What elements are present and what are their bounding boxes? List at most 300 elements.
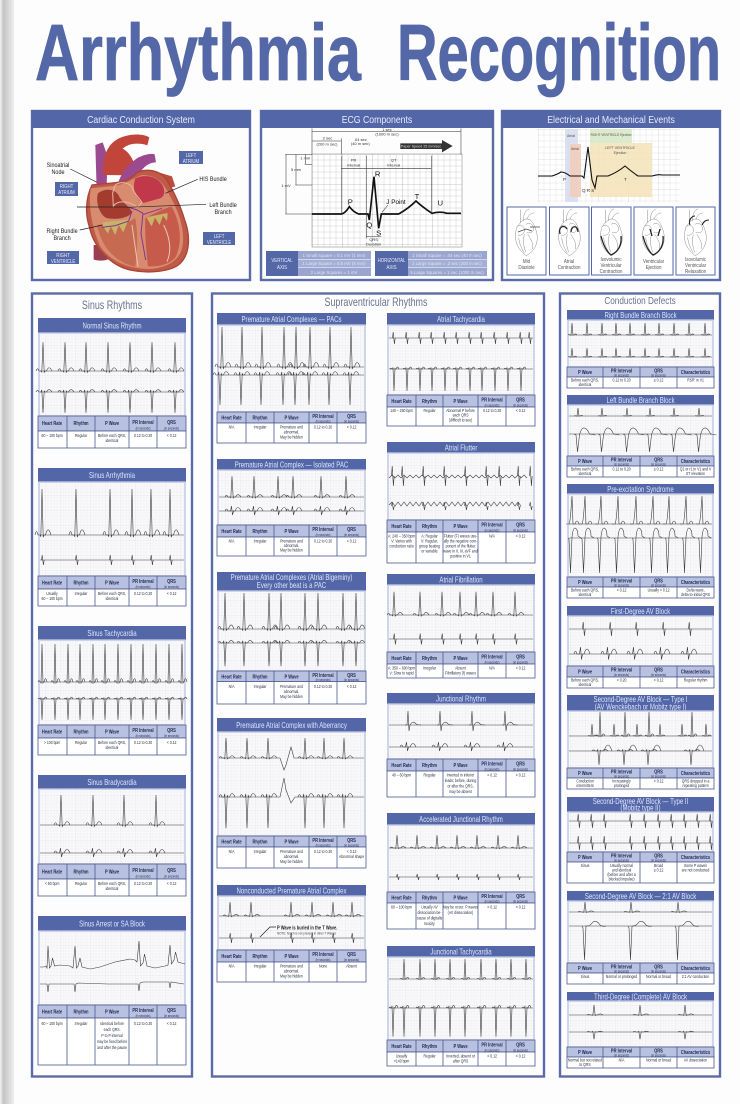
- diagram: Ventricular Ejection: Ventricular: [643, 259, 664, 265]
- data table: < 0.12: [516, 772, 526, 778]
- data table: (in seconds): [316, 533, 330, 537]
- data table: P Wave: [578, 370, 592, 375]
- data table: N/A: [229, 684, 235, 689]
- card: Sinus Arrest or SA Block: Sinus Arrest or SA Block: [79, 920, 145, 929]
- panel: Cardiac Conduction System: [32, 110, 250, 280]
- data table: [217, 836, 366, 868]
- data table: P Wave: [453, 656, 468, 661]
- data table: identical: [579, 382, 591, 387]
- card: Nonconducted Premature Atrial Complex: [217, 885, 366, 982]
- card: Premature Atrial Complex with Aberrancy: Premature Atrial Complex with Aberrancy: [236, 721, 347, 730]
- data table: < 0.12: [617, 587, 627, 593]
- data table: P Wave: [578, 966, 592, 971]
- diagram: Ventricular Ejection: [634, 207, 673, 275]
- data table: May be hidden: [280, 694, 303, 699]
- data table: Irregular: [75, 591, 88, 596]
- data table: Heart Rate: [221, 839, 242, 845]
- ECG timing chart: LEFT VENTRICLE: [605, 146, 636, 150]
- data table: 0.12 to 0.20: [612, 377, 631, 383]
- data table: A: 350 – 600 bpm: [388, 665, 415, 671]
- data table: < 0.12: [167, 1021, 177, 1026]
- label box: right ventricle: RIGHT: [56, 253, 70, 259]
- card: Pre-excitation Syndrome: [566, 484, 714, 598]
- data table: [567, 852, 714, 883]
- data table: < 0.12: [347, 849, 356, 854]
- data table: Normal but not related: [568, 1057, 602, 1063]
- data table: 0.12 to 0.20: [134, 1021, 153, 1026]
- ECG diagram: waveform and dimensions: R: [375, 170, 381, 179]
- diagram: Ventricular Ejection: Ejection: [646, 265, 662, 271]
- data table: (in seconds): [164, 734, 179, 738]
- data table: leads; before, during: [445, 778, 476, 783]
- diagram: Isovolumic Ventricular Contraction: Ventricular: [600, 263, 622, 269]
- label: HIS Bundle: HIS Bundle: [199, 175, 227, 183]
- data table: 0.12 to 0.20: [134, 591, 153, 596]
- data table: (in seconds): [651, 1053, 666, 1058]
- data table: abnormal.: [284, 543, 299, 548]
- data table: < 0.12: [516, 1053, 526, 1059]
- data table: (in seconds): [164, 874, 179, 879]
- data table: (in seconds): [651, 373, 666, 378]
- data table: 0.12 to 0.20: [314, 849, 333, 854]
- label box: right ventricle: VENTRICLE: [51, 259, 76, 265]
- data table: < 60 bpm: [45, 881, 60, 886]
- card: Premature Atrial Complexes (Atrial Bigeminy): [217, 572, 366, 704]
- data table: PR Interval: [611, 769, 632, 775]
- label: Right Bundle Branch: Right Bundle: [47, 227, 78, 235]
- data table: Rhythm: [73, 421, 89, 426]
- data table: (in seconds): [513, 403, 528, 408]
- data table: Heart Rate: [42, 580, 63, 586]
- data table: (in seconds): [614, 1053, 629, 1058]
- data table: are not conducted: [682, 867, 709, 873]
- data table: (AV dissociation): [448, 910, 474, 915]
- card: Right Bundle Branch Block: Right Bundle Branch Block: [604, 311, 677, 320]
- data table: Abnormal shape: [339, 854, 365, 859]
- data table: Regular: [424, 408, 436, 413]
- data table: Regular rhythm: [684, 677, 708, 683]
- ECG diagram: waveform and dimensions: T: [415, 192, 420, 201]
- data table: [38, 864, 186, 896]
- diagram: Atrial Contraction: [550, 207, 589, 275]
- ECG trace: [389, 711, 533, 751]
- data table: Inverted, absent or: [446, 1053, 475, 1059]
- data table: (in seconds): [651, 969, 666, 974]
- data table: may be absent: [449, 789, 473, 794]
- diagram: Isovolumic Ventricular Contraction: Isovolumic: [600, 257, 622, 263]
- data table: N/A: [229, 849, 235, 854]
- ECG trace: [218, 593, 365, 666]
- ECG trace: [40, 795, 184, 857]
- data table: < 0.12: [487, 772, 498, 778]
- data table: Sinus: [581, 863, 589, 868]
- ECG timing chart: P: [563, 177, 566, 182]
- data table: and identical: [612, 867, 631, 873]
- data table: (in seconds): [614, 774, 629, 779]
- data table: (in seconds): [513, 660, 528, 665]
- data table: P Wave: [578, 669, 592, 675]
- data table: (in seconds): [614, 373, 629, 378]
- card: Junctional Rhythm: Junctional Rhythm: [436, 695, 486, 704]
- data table: Irregular: [254, 684, 267, 689]
- ECG trace: [35, 489, 184, 565]
- data table: PR Interval: [481, 761, 503, 767]
- data table: Irregular: [254, 849, 267, 854]
- ECG diagram: waveform and dimensions: (1000 m sec): [375, 132, 399, 137]
- data table: QRS: [347, 838, 356, 843]
- data table: identical: [106, 745, 118, 750]
- data table: PR Interval: [132, 1008, 154, 1013]
- panel: ECG Components: [261, 110, 493, 280]
- data table: P Wave: [453, 524, 468, 529]
- data table: P Wave: [578, 855, 592, 860]
- data table: Before each QRS,: [98, 740, 126, 745]
- data table: Before each QRS,: [98, 591, 126, 596]
- data table: PR Interval: [312, 673, 334, 678]
- data table: QRS: [516, 894, 525, 899]
- ECG trace: [387, 592, 533, 644]
- data table: PR Interval: [611, 368, 632, 374]
- data table: (in seconds): [485, 528, 499, 533]
- data table: PR Interval: [611, 853, 632, 859]
- label box: left atrium: ATRIUM: [183, 159, 199, 165]
- panel heading: ECG Components: [342, 114, 412, 126]
- data table: N/A: [619, 1057, 625, 1063]
- data table: Rhythm: [252, 529, 268, 534]
- data table: PR Interval: [481, 894, 503, 899]
- data table: Characteristics: [681, 669, 711, 675]
- data table: Q1 or r1 in V1 and V: [680, 466, 711, 472]
- card: Second-Degree AV Block - Type II: Second-Degree AV Block — Type II: [593, 797, 688, 806]
- ECG trace: [569, 814, 712, 850]
- data table: Regular: [75, 881, 88, 886]
- card: Second-Degree AV Block - Type I: Second-Degree AV Block — Type I: [594, 695, 687, 704]
- data table: (difficult to see): [449, 417, 473, 423]
- data table: Before each QRS,: [571, 677, 599, 683]
- card: Second-Degree AV Block - Type I: (AV Wenckebach or Mobitz type I): [595, 703, 686, 712]
- data table: (in seconds): [485, 403, 499, 408]
- data table: Before each QRS,: [571, 466, 599, 472]
- data table: QRS: [347, 673, 356, 678]
- ECG diagram: waveform and dimensions: .2 sec: [322, 135, 332, 140]
- label: Sinoatrial Node: Node: [52, 168, 65, 176]
- data table: Heart Rate: [42, 1009, 63, 1015]
- table: vertical axis: [266, 251, 371, 276]
- data table: P Wave: [284, 415, 299, 421]
- card: Sinus Arrhythmia: Sinus Arrhythmia: [89, 471, 135, 480]
- data table: Normal or broad: [646, 974, 671, 979]
- data table: Flutter (F) waves usu-: [444, 533, 477, 539]
- data table: (in seconds): [316, 678, 330, 682]
- ECG diagram: waveform and dimensions: 1 mm: [300, 155, 311, 160]
- ECG trace: [36, 342, 184, 413]
- data table: intermittent: [577, 783, 594, 788]
- data table: Rhythm: [73, 580, 89, 586]
- data table: or variable: [421, 548, 438, 554]
- data table: Rhythm: [73, 1009, 89, 1015]
- data table: 0.12 to 0.20: [134, 881, 153, 886]
- data table: (in seconds): [614, 583, 629, 588]
- data table: QRS: [654, 667, 663, 673]
- table: horizontal axis: 5 Large Squares = 1 sec (1000 m sec): [410, 270, 484, 275]
- data table: Sinus: [581, 974, 589, 979]
- data table: Irregular: [75, 1021, 88, 1026]
- data table: Characteristics: [681, 1050, 711, 1055]
- ECG trace: [569, 902, 712, 960]
- data table: [387, 520, 535, 563]
- data table: Rhythm: [422, 524, 437, 529]
- data table: PR Interval: [611, 578, 632, 584]
- data table: Heart Rate: [42, 421, 63, 426]
- card: Nonconducted Premature Atrial Complex: Nonconducted Premature Atrial Complex: [237, 887, 347, 896]
- data table: < 0.12: [516, 665, 526, 671]
- ECG diagram: waveform and dimensions: 5 mm: [291, 167, 302, 172]
- ECG trace: [219, 902, 364, 943]
- ECG trace: [389, 466, 532, 510]
- data table: P Wave: [453, 763, 468, 768]
- data table: Usually > 0.12: [648, 587, 670, 593]
- data table: QRS: [167, 1008, 176, 1013]
- data table: blocked impulse): [609, 876, 635, 882]
- label box: left ventricle: [203, 232, 235, 246]
- data table: Heart Rate: [221, 529, 242, 534]
- data table: (in seconds): [136, 874, 150, 879]
- ECG trace: [213, 327, 364, 405]
- data table: (in seconds): [485, 899, 499, 904]
- card: Premature Atrial Complexes (Atrial Bigeminy): Premature Atrial Complexes (Atrial Bigeminy): [231, 573, 352, 582]
- data table: Heart Rate: [221, 674, 242, 680]
- card: Atrial Flutter: [387, 442, 535, 563]
- data table: QRS: [654, 964, 663, 970]
- data table: Heart Rate: [221, 954, 242, 959]
- data table: 0.12 to 0.20: [314, 424, 333, 430]
- data table: < 0.12: [487, 1053, 498, 1059]
- data table: [38, 416, 186, 448]
- data table: (in seconds): [316, 419, 330, 424]
- data table: [38, 1005, 186, 1065]
- data table: [567, 666, 714, 688]
- section heading: Conduction Defects: [604, 294, 676, 306]
- label: Left Bundle Branch: Left Bundle: [209, 201, 237, 209]
- data table: Rhythm: [252, 674, 268, 680]
- table: horizontal axis: AXIS: [387, 265, 397, 271]
- data table: PR Interval: [611, 457, 632, 463]
- card: Atrial Fibrillation: Atrial Fibrillation: [439, 576, 483, 585]
- data table: < 0.12: [654, 778, 664, 784]
- data table: abnormal.: [284, 689, 299, 694]
- data table: Heart Rate: [391, 656, 412, 661]
- data table: N/A: [229, 424, 235, 430]
- ECG trace: [569, 1005, 712, 1039]
- data table: Regular: [75, 740, 88, 745]
- data table: (in seconds): [485, 660, 499, 665]
- data table: PR Interval: [481, 397, 503, 403]
- data table: PR Interval: [481, 654, 503, 660]
- data table: QRS: [654, 578, 663, 584]
- data table: Regular: [424, 1053, 436, 1059]
- data table: [387, 892, 535, 929]
- data table: Characteristics: [681, 370, 711, 375]
- data table: (in seconds): [485, 1048, 499, 1053]
- data table: QRS: [347, 414, 356, 419]
- data table: (in seconds): [136, 426, 150, 431]
- data table: > 0.20: [617, 677, 627, 683]
- data table: Rhythm: [252, 415, 268, 421]
- data table: identical: [579, 471, 591, 476]
- data table: Normal or prolonged: [606, 974, 637, 979]
- data table: QRS: [167, 868, 176, 873]
- ECG trace: [389, 959, 533, 1037]
- data table: PR Interval: [132, 868, 154, 873]
- label box: right atrium: RIGHT: [60, 184, 73, 190]
- label box: left atrium: [179, 151, 203, 165]
- ECG diagram: waveform and dimensions: Interval: [387, 162, 400, 167]
- data table: P Wave: [578, 459, 592, 464]
- data table: V: Slow to rapid: [390, 670, 414, 676]
- data table: cause of digitalis: [417, 915, 442, 921]
- data table: < 0.12: [516, 904, 526, 910]
- card: Sinus Bradycardia: [38, 775, 186, 896]
- data table: 0.12 to 0.20: [134, 433, 153, 438]
- ECG trace: [40, 941, 185, 992]
- data table: and after the pause: [97, 1045, 128, 1050]
- data table: Heart Rate: [391, 524, 412, 529]
- illustration: heart: [70, 134, 206, 272]
- data table: [217, 950, 366, 982]
- card: Accelerated Junctional Rhythm: [387, 813, 535, 929]
- data table: 0.12 to 0.20: [314, 684, 333, 689]
- data table: Broad: [654, 863, 663, 868]
- data table: (in seconds): [614, 673, 629, 677]
- data table: [217, 671, 366, 704]
- data table: (in seconds): [485, 767, 499, 772]
- data table: (in seconds): [651, 673, 666, 677]
- data table: ≥ 0.12: [654, 377, 664, 383]
- data table: identical: [106, 438, 118, 443]
- data table: QRS: [516, 397, 525, 403]
- data table: (in seconds): [164, 585, 179, 589]
- data table: Delta wave,: [687, 587, 705, 593]
- data table: 60 – 100 bpm: [391, 904, 413, 910]
- data table: Abnormal P before: [446, 408, 475, 413]
- data table: < 0.12: [167, 591, 177, 596]
- data table: Heart Rate: [42, 869, 63, 875]
- ECG trace: [219, 738, 364, 828]
- card: Left Bundle Branch Block: Left Bundle Branch Block: [606, 396, 675, 405]
- data table: (in seconds): [344, 958, 359, 962]
- panel: Sinus Rhythms: [32, 294, 192, 1076]
- card: Normal Sinus Rhythm: Normal Sinus Rhythm: [82, 322, 142, 331]
- card: First-Degree AV Block: First-Degree AV Block: [611, 607, 671, 616]
- data table: Rhythm: [73, 729, 89, 735]
- data table: Absent: [455, 665, 466, 671]
- data table: PR Interval: [481, 522, 503, 528]
- data table: 140 – 250 bpm: [390, 408, 414, 413]
- data table: Before each QRS,: [571, 377, 599, 383]
- data table: Rhythm: [422, 1044, 437, 1049]
- data table: QRS: [654, 1048, 663, 1054]
- data table: N/A: [229, 538, 235, 544]
- data table: PR Interval: [132, 420, 154, 425]
- data table: PR Interval: [132, 579, 154, 584]
- data table: P Wave: [284, 954, 299, 959]
- data table: Normal or broad: [646, 1057, 671, 1063]
- data table: (in seconds): [651, 583, 666, 588]
- data table: [567, 456, 714, 477]
- data table: PR Interval: [481, 1042, 503, 1048]
- title: Arrhythmia: [35, 8, 361, 97]
- ECG diagram: waveform and dimensions: Interval: [347, 162, 360, 167]
- data table: [567, 367, 714, 388]
- data table: to QRS: [579, 1062, 591, 1067]
- data table: Rhythm: [252, 954, 268, 959]
- data table: A: Regular: [421, 533, 438, 539]
- data table: < 0.12: [347, 538, 357, 544]
- panel: Supraventricular Rhythms: [212, 294, 544, 1076]
- card: Pre-excitation Syndrome: Pre-excitation Syndrome: [607, 485, 674, 494]
- data table: repeating pattern: [683, 783, 709, 788]
- data table: P Wave: [105, 1009, 119, 1015]
- table: vertical axis: AXIS: [277, 265, 288, 271]
- diagram: Atrial Contraction: Atrial: [564, 259, 574, 265]
- ECG diagram: waveform and dimensions: Q: [366, 220, 372, 229]
- data table: PR Interval: [312, 952, 334, 957]
- data table: (in seconds): [513, 1048, 528, 1053]
- data table: QRS: [347, 952, 356, 957]
- card: Sinus Tachycardia: [38, 626, 187, 755]
- data table: ≥ 0.12: [654, 867, 664, 873]
- card: Sinus Bradycardia: Sinus Bradycardia: [87, 778, 137, 787]
- data table: P Wave: [453, 1044, 468, 1049]
- data table: < 0.12: [167, 740, 177, 745]
- ECG trace: [219, 476, 364, 515]
- card: Atrial Flutter: Atrial Flutter: [445, 444, 478, 453]
- data table: PR Interval: [312, 838, 334, 843]
- data table: Usually: [396, 1053, 407, 1059]
- diagram: Isovolumic Ventricular Contraction: Contraction: [600, 269, 623, 275]
- card: Accelerated Junctional Rhythm: Accelerated Junctional Rhythm: [419, 815, 503, 824]
- data table: V: Varies with: [391, 538, 412, 544]
- data table: Fibrillatory (f) waves: [445, 670, 476, 676]
- data table: 40 – 60 bpm: [392, 772, 412, 778]
- data table: each QRS: [453, 412, 469, 418]
- data table: 0.12 to 0.20: [483, 408, 502, 413]
- table: vertical axis: VERTICAL: [271, 258, 293, 264]
- ECG diagram: waveform and dimensions: [281, 127, 461, 247]
- ECG diagram: waveform and dimensions: P: [348, 197, 353, 206]
- data table: Premature and: [280, 684, 303, 689]
- data table: > 100 bpm: [44, 740, 61, 745]
- data table: (in seconds): [344, 678, 359, 682]
- data table: (in seconds): [164, 1014, 179, 1018]
- left edge shadow: [0, 0, 14, 1104]
- label: Right Bundle Branch: Branch: [53, 234, 71, 242]
- ECG trace: [569, 712, 712, 765]
- card: Third-Degree (Complete) AV Block: [567, 992, 714, 1068]
- data table: A: 240 – 350 bpm: [388, 533, 415, 539]
- data table: May be hidden: [280, 434, 303, 440]
- data table: May be hidden: [280, 547, 303, 553]
- data table: 2:1 AV conduction: [682, 974, 709, 979]
- diagram: Mid Diastole: Diastole: [518, 265, 535, 271]
- data table: 60 – 100 bpm: [42, 433, 63, 438]
- data table: abnormal.: [284, 854, 299, 859]
- data table: May be hidden: [280, 973, 303, 979]
- ECG timing chart: [538, 129, 680, 202]
- data table: QRS: [347, 527, 356, 532]
- data table: Premature and: [280, 849, 303, 854]
- data table: 0.12 to 0.20: [612, 466, 631, 472]
